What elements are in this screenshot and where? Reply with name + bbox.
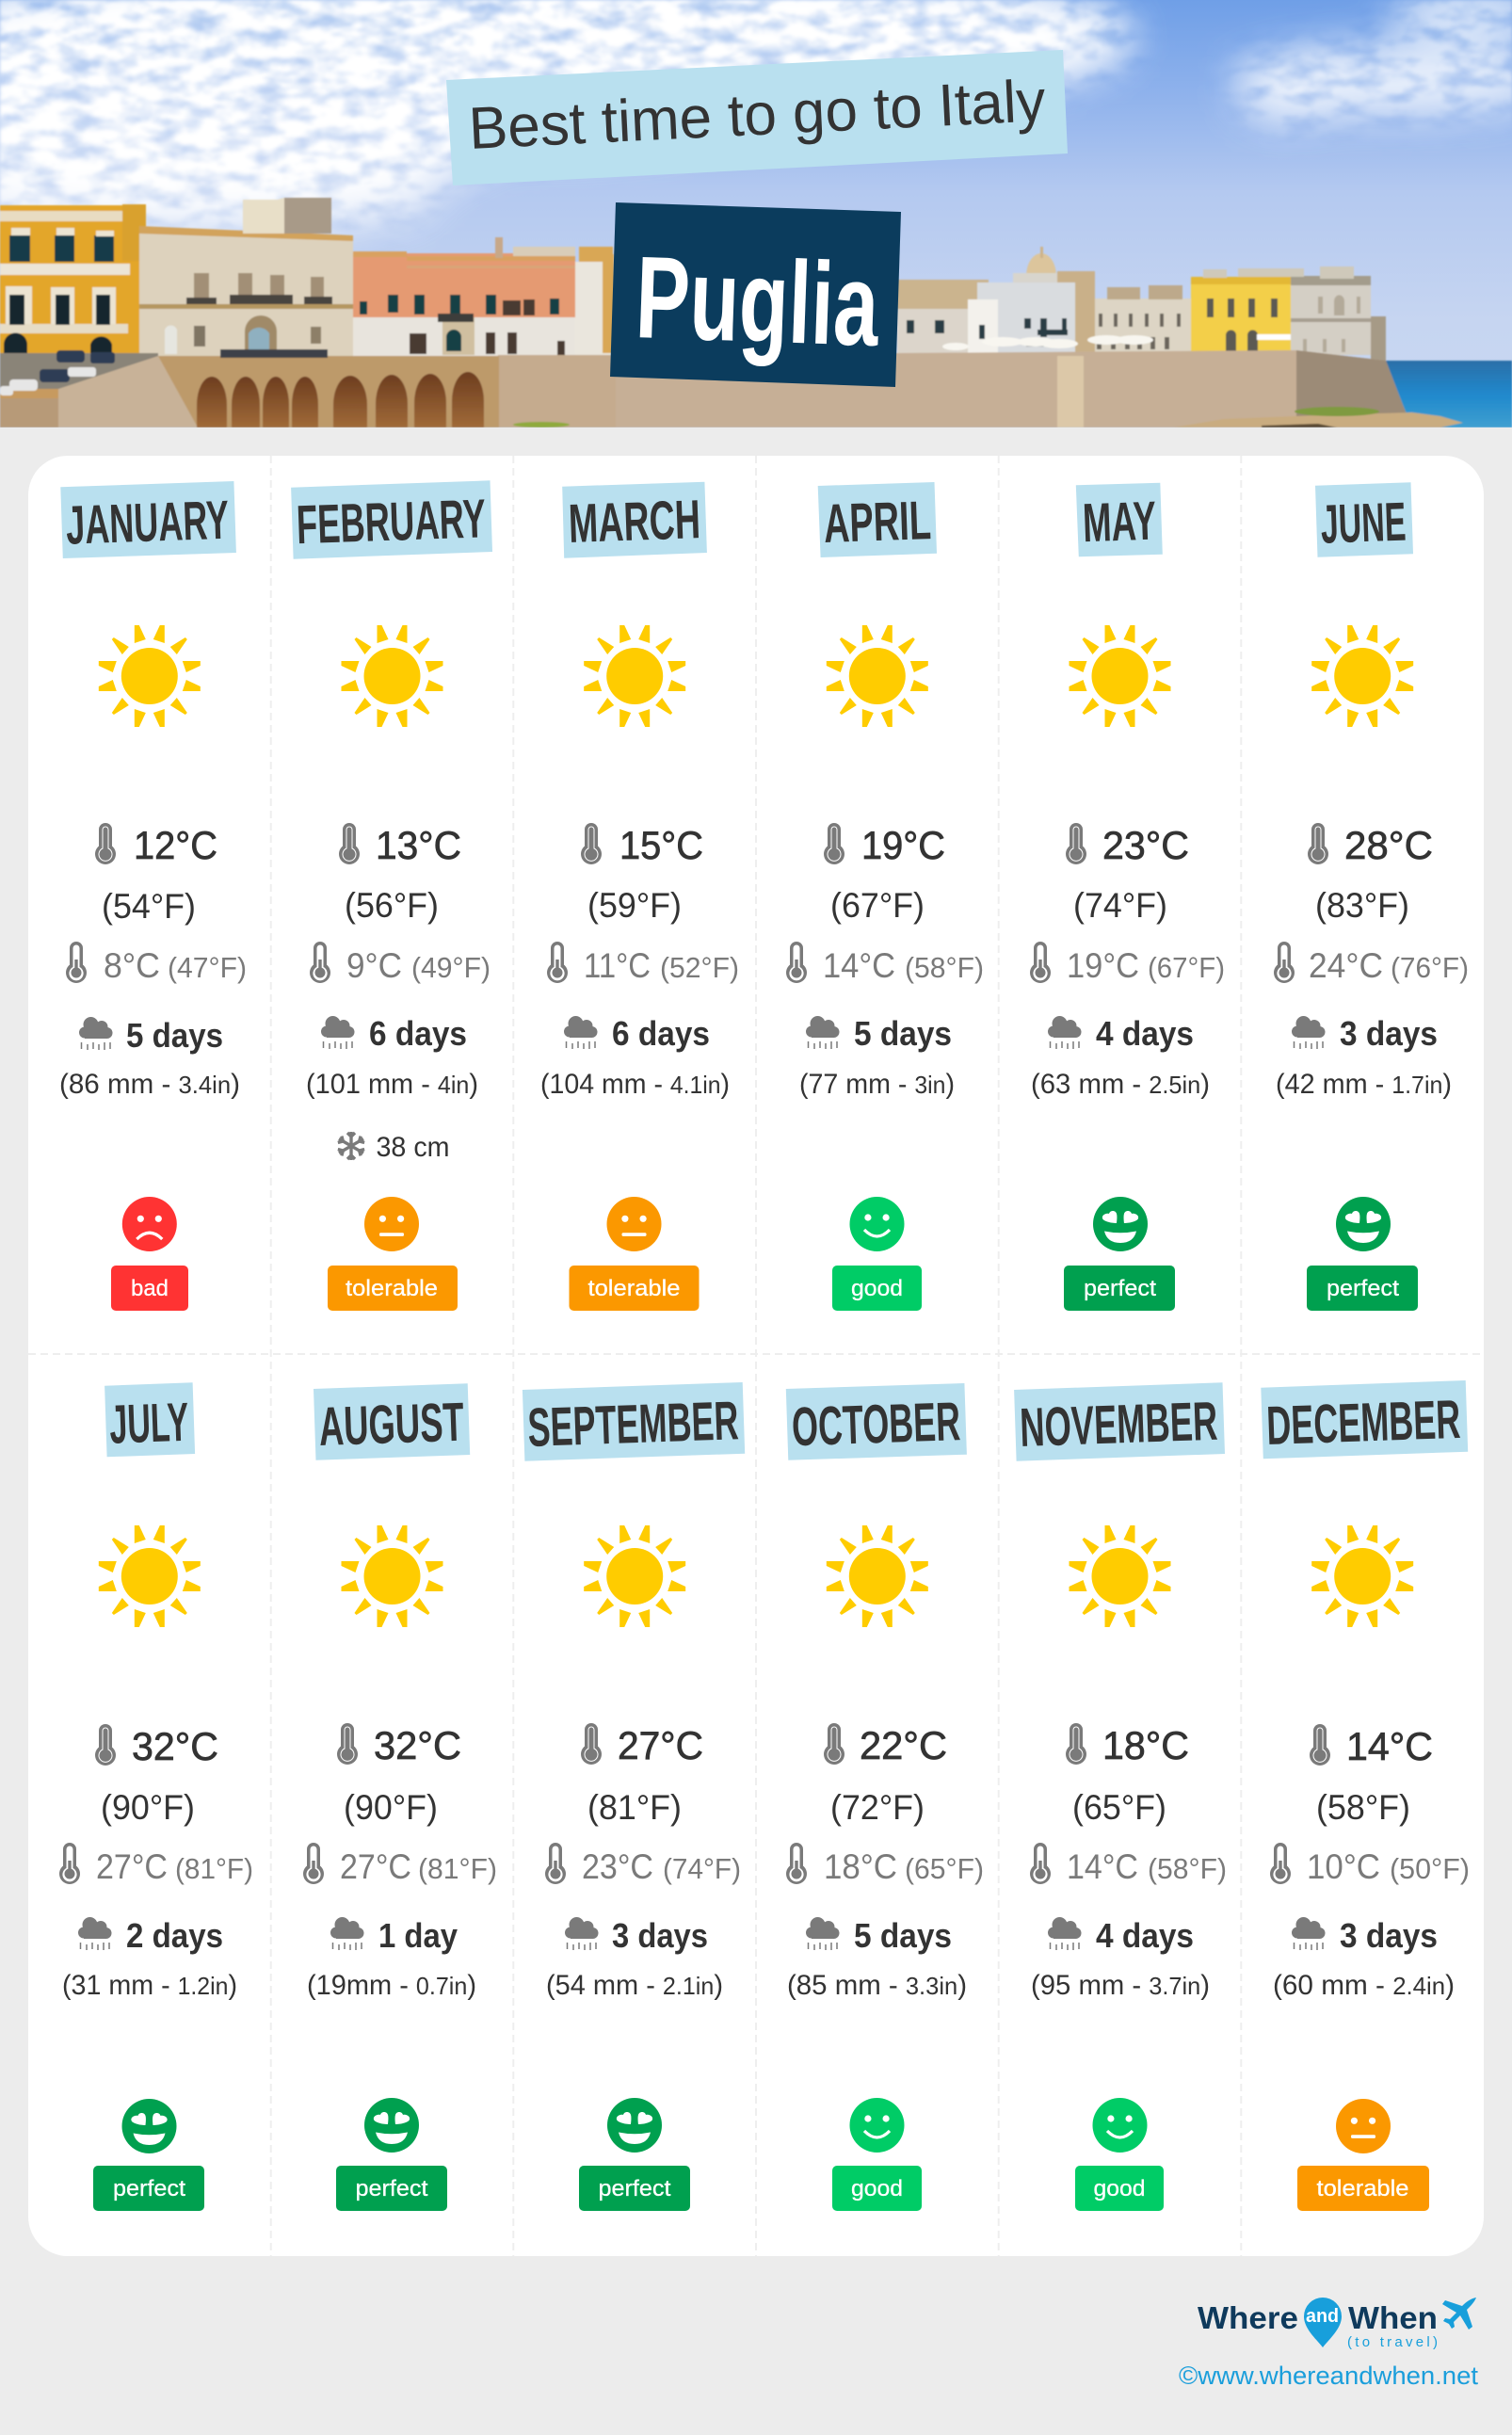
- rainfall: (19mm - 0.7in): [307, 1970, 476, 2001]
- rainy days: 2 days: [126, 1916, 223, 1955]
- high temperature fahrenheit: (81°F): [587, 1788, 682, 1827]
- low temperature: 9°C: [346, 946, 402, 985]
- low temperature: [303, 1843, 497, 1886]
- rating badge: perfect: [1327, 1276, 1399, 1301]
- logo: Where and When: (to travel): [1347, 2334, 1438, 2350]
- month heading: [105, 1382, 195, 1457]
- rainfall: (101 mm - 4in): [306, 1069, 478, 1100]
- icon: happy face: [849, 1197, 904, 1251]
- low temperature: 24°C: [1309, 946, 1383, 985]
- rainfall: (95 mm - 3.7in): [1031, 1970, 1210, 2001]
- rainy days: 5 days: [854, 1916, 952, 1955]
- snowfall: 38 cm: [377, 1132, 450, 1163]
- logo: Where and When: When: [1348, 2300, 1438, 2335]
- icon: sun: [827, 1525, 928, 1627]
- rating badge: perfect: [599, 2176, 671, 2201]
- low temperature: 18°C: [824, 1847, 897, 1886]
- rainfall: (42 mm - 1.7in): [1276, 1069, 1452, 1100]
- low temperature: [66, 942, 247, 985]
- low temperature: 19°C: [1067, 946, 1139, 985]
- low temperature: 23°C: [582, 1847, 653, 1886]
- month heading: MAY: [1082, 491, 1157, 554]
- rating badge: tolerable: [587, 1276, 680, 1301]
- rating badge: [328, 1266, 458, 1311]
- high temperature fahrenheit: (74°F): [1073, 886, 1167, 925]
- rating badge: good: [851, 1276, 903, 1301]
- rainy days: 1 day: [378, 1916, 458, 1955]
- icon: neutral face: [364, 1197, 419, 1251]
- rating badge: good: [851, 2176, 903, 2201]
- low temperature: [786, 942, 984, 985]
- rainy days: [1292, 1014, 1438, 1053]
- high temperature: 18°C: [1102, 1723, 1189, 1767]
- high temperature: 15°C: [619, 823, 703, 867]
- rainy days: [806, 1014, 952, 1053]
- rainy days: 3 days: [1340, 1014, 1438, 1053]
- icon: heart-eyes face: [607, 2098, 662, 2153]
- high temperature: 28°C: [1344, 823, 1433, 867]
- low temperature: (81°F): [175, 1852, 253, 1885]
- rainfall: (31 mm - 1.2in): [62, 1970, 237, 2001]
- icon: sun: [1070, 1525, 1171, 1627]
- rating badge: perfect: [113, 2176, 185, 2201]
- low temperature: 14°C: [1067, 1847, 1138, 1886]
- rainfall: (86 mm - 3.4in): [59, 1069, 240, 1100]
- high temperature: 23°C: [1102, 823, 1189, 867]
- high temperature: [1066, 1723, 1189, 1767]
- high temperature: [339, 823, 461, 867]
- rainy days: 4 days: [1096, 1916, 1194, 1955]
- rating badge: perfect: [1084, 1276, 1156, 1301]
- high temperature: [1310, 1724, 1433, 1768]
- icon: sun: [99, 625, 201, 727]
- low temperature: (50°F): [1390, 1852, 1470, 1885]
- month heading: [60, 481, 236, 558]
- high temperature fahrenheit: (65°F): [1072, 1788, 1166, 1827]
- rainy days: [806, 1916, 952, 1955]
- rating badge: [336, 2166, 447, 2211]
- icon: sun: [584, 1525, 685, 1627]
- month heading: MARCH: [568, 489, 701, 555]
- logo: Where and When: Where: [1198, 2300, 1298, 2335]
- rainy days: 6 days: [612, 1014, 710, 1053]
- rating badge: [832, 2166, 922, 2211]
- low temperature: [786, 1843, 984, 1886]
- website credit: ©www.whereandwhen.net: [1179, 2362, 1478, 2390]
- month heading: SEPTEMBER: [526, 1390, 740, 1459]
- rainy days: [79, 1016, 223, 1055]
- rainy days: [565, 1916, 708, 1955]
- title banner: [446, 50, 1068, 185]
- high temperature: [1066, 823, 1189, 867]
- low temperature: (74°F): [663, 1852, 741, 1885]
- icon: heart-eyes face: [1336, 1197, 1391, 1251]
- panel: March: [540, 482, 739, 1311]
- icon: neutral face: [1336, 2099, 1391, 2153]
- rainy days: [1048, 1014, 1194, 1053]
- month heading: [786, 1383, 967, 1460]
- rating badge: [1064, 1266, 1175, 1311]
- low temperature: (58°F): [1148, 1852, 1227, 1885]
- low temperature: [1270, 1843, 1470, 1886]
- month heading: APRIL: [823, 490, 932, 555]
- low temperature: (65°F): [905, 1852, 984, 1885]
- low temperature: (76°F): [1391, 951, 1469, 984]
- panel: January: [59, 481, 247, 1311]
- month heading: [818, 482, 937, 557]
- rating badge: [111, 1266, 188, 1311]
- high temperature: [581, 823, 703, 867]
- rainy days: [330, 1916, 458, 1955]
- month heading: JANUARY: [65, 490, 230, 556]
- icon: neutral face: [606, 1197, 661, 1251]
- icon: happy face: [1092, 2098, 1147, 2153]
- month heading: [1315, 482, 1413, 557]
- rainfall: (77 mm - 3in): [799, 1069, 955, 1100]
- low temperature: 11°C: [584, 946, 651, 985]
- low temperature: (81°F): [418, 1852, 497, 1885]
- rainfall: (60 mm - 2.4in): [1273, 1970, 1455, 2001]
- region title: Puglia: [610, 202, 901, 387]
- rating badge: bad: [131, 1276, 169, 1301]
- icon: sun: [341, 625, 442, 727]
- month heading: FEBRUARY: [296, 488, 487, 556]
- month heading: [1076, 483, 1163, 556]
- high temperature: 14°C: [1346, 1724, 1433, 1768]
- logo: Where and When: and: [1306, 2306, 1339, 2327]
- panel: April: [786, 482, 984, 1311]
- low temperature: (52°F): [660, 951, 739, 984]
- icon: heart-eyes face: [1093, 1197, 1148, 1251]
- panel: May: [1030, 483, 1225, 1311]
- high temperature: 32°C: [132, 1724, 218, 1768]
- high temperature: 22°C: [860, 1723, 947, 1767]
- low temperature: 14°C: [823, 946, 895, 985]
- rating badge: [1307, 1266, 1418, 1311]
- low temperature: (58°F): [905, 951, 984, 984]
- panel: December: [1261, 1380, 1470, 2211]
- low temperature: 8°C: [104, 946, 160, 985]
- panel: August: [303, 1383, 497, 2211]
- rainy days: 4 days: [1096, 1014, 1194, 1053]
- icon: bad face: [122, 1197, 177, 1251]
- low temperature: 27°C: [340, 1847, 411, 1886]
- low temperature: [547, 942, 739, 985]
- icon: sun: [99, 1525, 201, 1627]
- month heading: NOVEMBER: [1019, 1391, 1218, 1459]
- region title: Puglia: Puglia: [634, 233, 881, 371]
- high temperature fahrenheit: (58°F): [1316, 1788, 1410, 1827]
- high temperature: 19°C: [861, 823, 945, 867]
- title banner: Best time to go to Italy: [467, 68, 1047, 162]
- month heading: [562, 482, 707, 558]
- logo: Where and When: [1198, 2298, 1476, 2350]
- rainy days: 3 days: [612, 1916, 708, 1955]
- white calendar card: [28, 456, 1484, 2256]
- high temperature fahrenheit: (72°F): [830, 1788, 925, 1827]
- icon: heart-eyes face: [364, 2098, 419, 2153]
- rainfall: (63 mm - 2.5in): [1031, 1069, 1210, 1100]
- rating badge: tolerable: [1316, 2176, 1408, 2201]
- snowfall: [337, 1132, 450, 1163]
- rating badge: perfect: [356, 2176, 428, 2201]
- high temperature: 27°C: [618, 1723, 703, 1767]
- rainy days: 5 days: [126, 1016, 223, 1055]
- rating badge: tolerable: [346, 1276, 438, 1301]
- high temperature: [581, 1723, 703, 1767]
- rainy days: [78, 1916, 223, 1955]
- high temperature: 13°C: [376, 823, 461, 867]
- low temperature: [1030, 1843, 1227, 1886]
- low temperature: 27°C: [96, 1847, 168, 1886]
- icon: sun: [827, 625, 928, 727]
- rainy days: 3 days: [1340, 1916, 1438, 1955]
- rating badge: [1075, 2166, 1164, 2211]
- panel: October: [786, 1383, 984, 2211]
- high temperature fahrenheit: (90°F): [344, 1788, 438, 1827]
- high temperature: 32°C: [374, 1723, 461, 1767]
- rainy days: [564, 1014, 710, 1053]
- high temperature: [95, 823, 217, 867]
- rating badge: [93, 2166, 204, 2211]
- icon: happy face: [849, 2098, 904, 2153]
- icon: sun: [341, 1525, 442, 1627]
- low temperature: [1030, 942, 1225, 985]
- rainy days: [321, 1014, 467, 1053]
- month heading: JUNE: [1320, 492, 1407, 556]
- low temperature: 10°C: [1307, 1847, 1380, 1886]
- low temperature: (49°F): [411, 951, 491, 984]
- high temperature fahrenheit: (83°F): [1315, 886, 1409, 925]
- low temperature: [59, 1843, 253, 1886]
- rainfall: (54 mm - 2.1in): [546, 1970, 723, 2001]
- month heading: AUGUST: [318, 1392, 465, 1458]
- panel: June: [1274, 482, 1469, 1311]
- rating badge: good: [1094, 2176, 1145, 2201]
- header photo: Gallipoli seafront: [0, 0, 1512, 427]
- high temperature fahrenheit: (56°F): [345, 886, 439, 925]
- icon: heart-eyes face: [122, 2099, 177, 2153]
- low temperature: [310, 942, 491, 985]
- high temperature: 12°C: [134, 823, 217, 867]
- high temperature fahrenheit: (59°F): [587, 886, 682, 925]
- month heading: [314, 1383, 470, 1460]
- month heading: OCTOBER: [791, 1391, 961, 1458]
- high temperature: [824, 823, 945, 867]
- rating badge: [1297, 2166, 1429, 2211]
- panel: September: [523, 1382, 745, 2211]
- rainy days: 5 days: [854, 1014, 952, 1053]
- high temperature fahrenheit: (54°F): [102, 887, 196, 926]
- rating badge: [569, 1266, 699, 1311]
- low temperature: (67°F): [1148, 951, 1225, 984]
- rainy days: 6 days: [369, 1014, 467, 1053]
- rainfall: (104 mm - 4.1in): [540, 1069, 730, 1100]
- month heading: [1014, 1382, 1225, 1461]
- panel: July: [59, 1382, 253, 2211]
- rating badge: [832, 1266, 922, 1311]
- high temperature: [95, 1724, 218, 1768]
- low temperature: [545, 1843, 741, 1886]
- month heading: [291, 480, 492, 559]
- rainfall: (85 mm - 3.3in): [787, 1970, 967, 2001]
- low temperature: [1274, 942, 1469, 985]
- high temperature fahrenheit: (90°F): [101, 1788, 195, 1827]
- icon: sun: [1311, 1525, 1413, 1627]
- panel: November: [1014, 1382, 1227, 2211]
- high temperature fahrenheit: (67°F): [830, 886, 925, 925]
- rainy days: [1292, 1916, 1438, 1955]
- rainy days: [1048, 1916, 1194, 1955]
- icon: sun: [1070, 625, 1171, 727]
- month heading: JULY: [108, 1392, 189, 1456]
- panel: February: [291, 480, 492, 1311]
- low temperature: (47°F): [168, 951, 247, 984]
- icon: sun: [584, 625, 685, 727]
- month heading: [523, 1382, 745, 1461]
- icon: sun: [1311, 625, 1413, 727]
- rating badge: [579, 2166, 690, 2211]
